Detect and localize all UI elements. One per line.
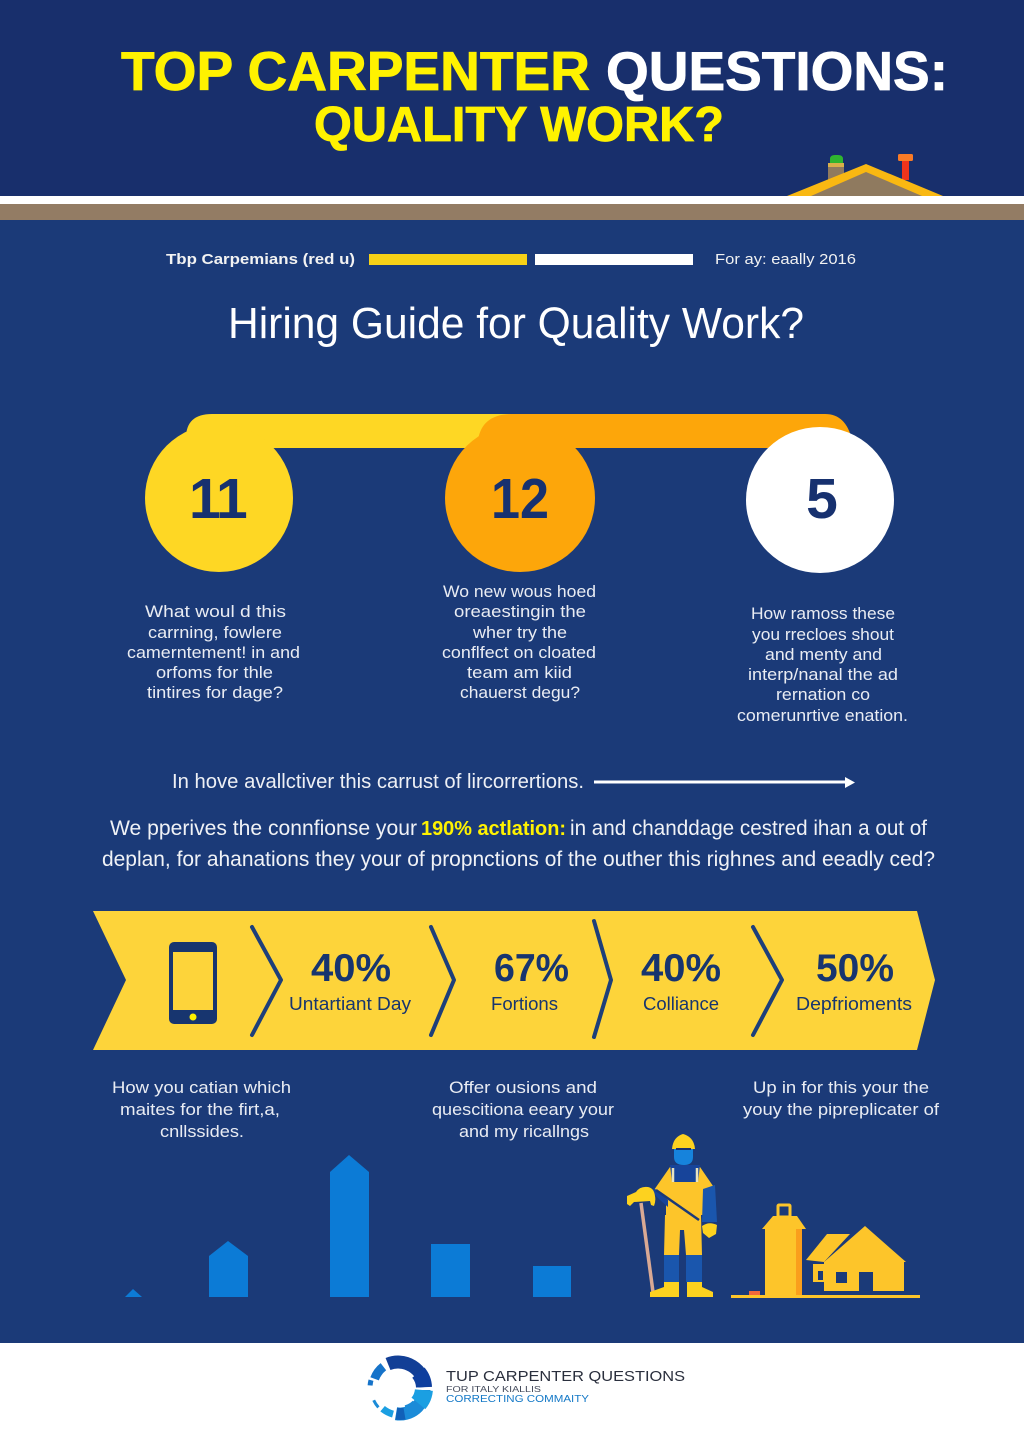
subheader row — [166, 251, 856, 268]
circle 5: 5 — [806, 467, 838, 531]
text block: column 1: carrning, fowlere — [148, 623, 282, 642]
title: TOP CARPENTER — [121, 40, 590, 102]
subheader row: Tbp Carpemians (red u) — [166, 251, 355, 268]
heading: Hiring Guide for Quality Work? — [228, 299, 804, 348]
ribbon stats banner — [93, 911, 935, 1050]
stat 67%: 67% — [494, 947, 569, 990]
stat 40% — [289, 947, 411, 1014]
stat 50%: 50% — [816, 947, 894, 990]
arrow line with text: In hove avallctiver this carrust of lircorrertions. — [172, 771, 584, 793]
text block: column 2: chauerst degu? — [460, 683, 580, 702]
icon: phone — [169, 942, 217, 1024]
text block: column 3: you rrecloes shout — [752, 625, 894, 644]
text block: lower centre: quescitiona eeary your — [432, 1100, 614, 1119]
footer band — [0, 1343, 1024, 1440]
text block: column 1: camerntement! in and — [127, 643, 300, 662]
paragraph: 190% actlation: — [421, 818, 566, 840]
stat 40%: 40% — [641, 947, 721, 990]
text block: column 3: rernation co — [776, 685, 870, 704]
stat 50% — [796, 947, 912, 1014]
circle 11: 11 — [189, 467, 248, 531]
stat 67%: Fortions — [491, 994, 558, 1014]
circle 5 — [746, 427, 894, 573]
text block: column 2: team am kiid — [467, 663, 572, 682]
text block: column 3: interp/nanal the ad — [748, 665, 898, 684]
stat 67% — [491, 947, 569, 1014]
text block: column 2: Wo new wous hoed — [443, 582, 596, 601]
text block: lower centre — [432, 1078, 614, 1141]
stat 40%: Untartiant Day — [289, 994, 411, 1014]
footer text — [446, 1368, 685, 1405]
title: QUALITY WORK? — [314, 98, 724, 152]
icon: roof with chimneys — [787, 154, 943, 196]
paragraph: deplan, for ahanations they your of propnctions of the outher this righnes and eeadly ced? — [102, 848, 935, 871]
text block: lower centre: and my ricallngs — [459, 1122, 589, 1141]
circle 12: 12 — [491, 467, 549, 531]
footer text: FOR ITALY KIALLIS — [446, 1385, 541, 1394]
text block: lower right: youy the pipreplicater of — [743, 1100, 939, 1119]
circle 12 — [445, 424, 595, 572]
chevrons — [252, 921, 782, 1037]
text block: column 1: What woul d this — [145, 602, 286, 621]
text block: column 1 — [127, 602, 300, 702]
bar chart: house bars — [125, 1155, 571, 1297]
text block: column 1: tintires for dage? — [147, 683, 283, 702]
text block: lower left — [112, 1078, 291, 1141]
subheader row: For ay: eaally 2016 — [715, 251, 856, 268]
roofline band — [0, 196, 1024, 220]
text block: lower right — [743, 1078, 939, 1119]
text block: column 2: oreaestingin the — [454, 602, 586, 621]
stat 40% — [641, 947, 721, 1014]
footer text: TUP CARPENTER QUESTIONS — [446, 1368, 685, 1385]
text block: lower left: How you catian which — [112, 1078, 291, 1097]
text block: lower right: Up in for this your the — [753, 1078, 929, 1097]
text block: lower left: cnllssides. — [160, 1122, 244, 1141]
paragraph — [102, 817, 935, 871]
paragraph: We pperives the connfionse your — [110, 817, 417, 840]
illustration: house and silo — [731, 1205, 920, 1298]
text block: column 2: conflfect on cloated — [442, 643, 596, 662]
arrow line with text — [172, 771, 855, 793]
number connector and circles — [145, 414, 894, 573]
text block: column 3: How ramoss these — [751, 604, 895, 623]
circle 11 — [145, 424, 293, 572]
text block: column 1: orfoms for thle — [156, 663, 273, 682]
stat 40%: 40% — [311, 947, 391, 990]
title — [121, 40, 948, 152]
footer logo — [370, 1362, 425, 1414]
text block: column 2 — [442, 582, 596, 702]
text block: column 3: and menty and — [765, 645, 882, 664]
text block: lower centre: Offer ousions and — [449, 1078, 597, 1097]
stat 40%: Colliance — [643, 994, 719, 1014]
footer text: CORRECTING COMMAITY — [446, 1393, 589, 1405]
text block: column 3: comerunrtive enation. — [737, 706, 908, 725]
text block: column 2: wher try the — [472, 623, 567, 642]
text block: column 3 — [737, 604, 908, 725]
header band — [0, 0, 1024, 196]
stat 50%: Depfrioments — [796, 994, 912, 1014]
paragraph: in and chanddage cestred ihan a out of — [570, 817, 927, 840]
text block: lower left: maites for the firt,a, — [120, 1100, 280, 1119]
illustration: carpenter — [627, 1134, 717, 1297]
title: QUESTIONS: — [606, 40, 948, 102]
